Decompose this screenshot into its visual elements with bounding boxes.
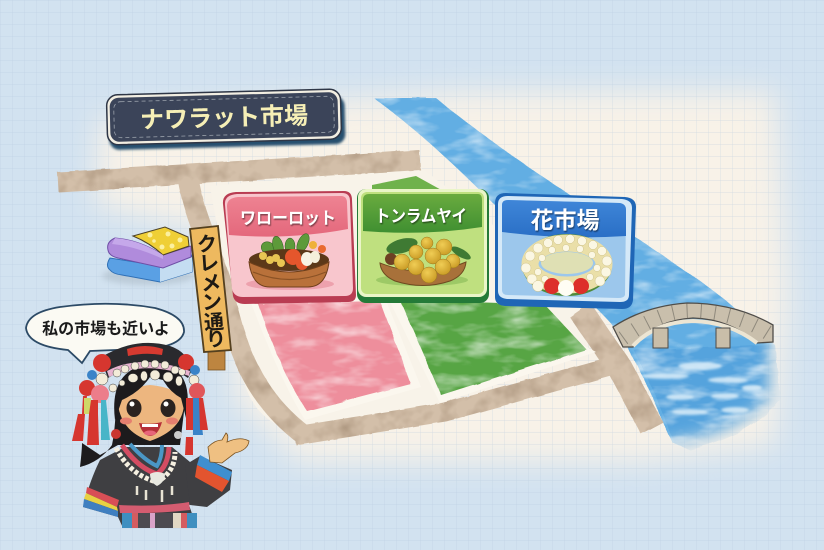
main horizontal road [58, 160, 420, 182]
bridge [613, 303, 773, 348]
card label: 花市場 [530, 207, 600, 233]
city blocks base [210, 167, 612, 432]
right road [580, 310, 652, 428]
icon: longan basket [376, 235, 473, 286]
sign text: り [205, 327, 227, 352]
lower road [295, 366, 612, 436]
necklace [116, 448, 175, 482]
skirt stripes [122, 513, 197, 528]
title plate [106, 89, 346, 150]
side road [188, 178, 305, 436]
icon: flower garland [521, 234, 612, 296]
panel: Ton Lam Yai market [357, 189, 489, 303]
tassels [72, 396, 208, 455]
sign text: 通 [203, 310, 225, 335]
hair back [80, 395, 186, 467]
icon: vegetable basket [246, 232, 334, 290]
river [374, 98, 780, 450]
headdress [100, 343, 192, 378]
sign text: ン [201, 291, 223, 315]
bubble text: 私の市場も近いよ [42, 319, 170, 338]
paper map sheet [95, 92, 790, 462]
character: hill tribe girl [72, 343, 249, 528]
sign text: レ [198, 252, 220, 276]
sleeve [185, 456, 232, 507]
card label: ワローロット [240, 209, 336, 228]
card label: トンラムヤイ [375, 207, 467, 226]
market block: pink [250, 298, 421, 420]
signpost: road sign [190, 226, 231, 370]
face [118, 385, 184, 441]
title text: ナワラット市場 [140, 103, 308, 134]
panel: flower market [495, 193, 636, 309]
market block: green [372, 176, 596, 403]
sign text: メ [200, 272, 222, 296]
pom-poms [79, 354, 205, 403]
roads [58, 160, 652, 436]
jacket [83, 447, 207, 528]
sign text [196, 232, 227, 352]
icon: folded cloth [102, 227, 194, 285]
speech bubble [26, 304, 184, 363]
sign text: ク [196, 232, 218, 257]
hand [208, 433, 249, 463]
panel: Worarot market [223, 191, 356, 304]
